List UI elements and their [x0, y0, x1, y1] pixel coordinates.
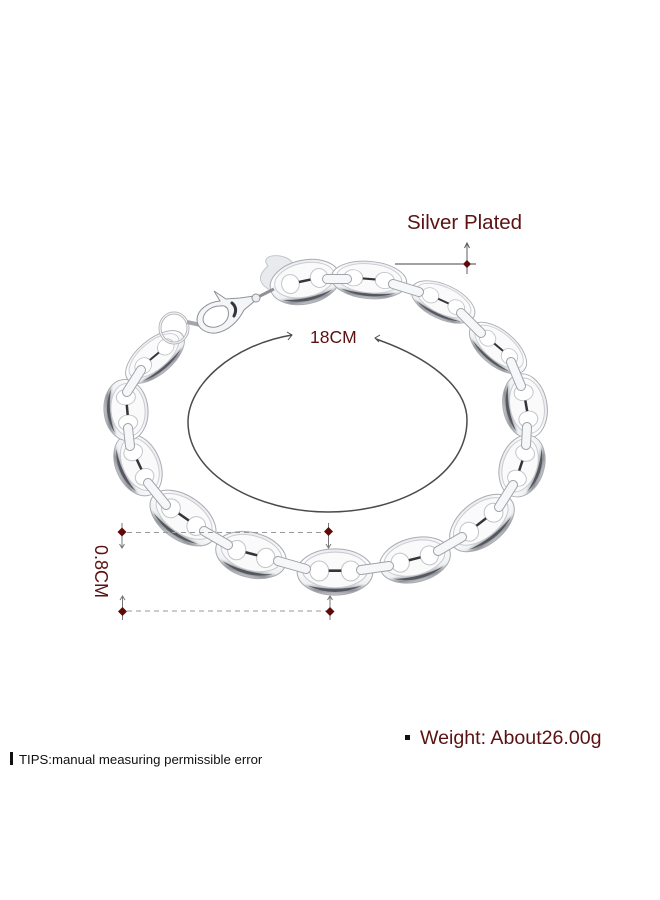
jump ring	[160, 313, 188, 343]
tips marker	[10, 752, 13, 765]
silver plated marker	[395, 243, 476, 274]
lobster clasp	[187, 289, 274, 333]
18CM label: 18CM	[310, 327, 357, 347]
circumference arrows	[188, 332, 467, 512]
silver plated label: Silver Plated	[407, 211, 522, 234]
bracelet	[101, 253, 553, 595]
0.8CM dimension	[91, 523, 334, 620]
0.8CM label: 0.8CM	[91, 545, 111, 598]
links	[101, 253, 553, 595]
weight bullet	[405, 735, 410, 740]
weight label: Weight: About26.00g	[420, 727, 602, 749]
heart charm	[260, 256, 293, 291]
tips note: TIPS:manual measuring permissible error	[19, 752, 263, 767]
connector bars	[127, 279, 527, 570]
